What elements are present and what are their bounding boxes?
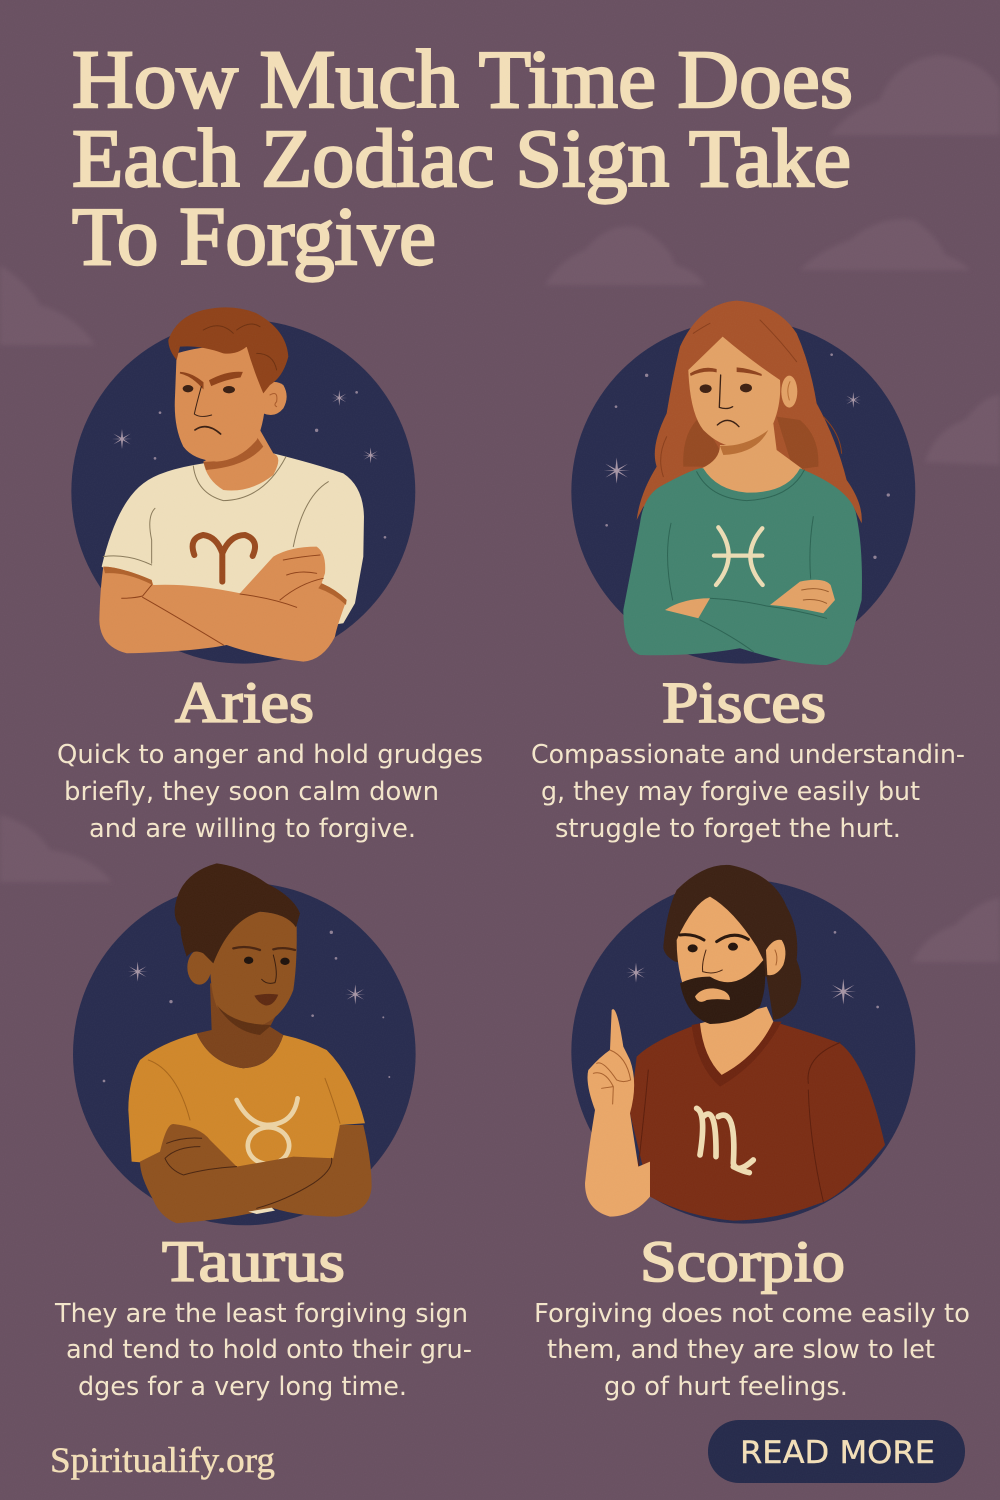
text: Scorpio description: them, and they are slow to let — [547, 1335, 935, 1365]
panel: Scorpio — [534, 865, 970, 1402]
heading: Pisces: Pisces — [662, 670, 826, 735]
text: Scorpio description: go of hurt feelings. — [604, 1372, 848, 1402]
text: Scorpio description — [534, 1299, 970, 1402]
brand name: Spiritualify.org — [50, 1440, 275, 1480]
panel: Pisces — [531, 301, 965, 844]
text: Taurus description: They are the least forgiving sign — [54, 1299, 468, 1329]
text: Pisces description: Compassionate and understandin- — [531, 740, 965, 770]
text: Aries description: and are willing to forgive. — [89, 814, 416, 844]
title: How Much Time Does — [72, 33, 853, 125]
title — [72, 33, 853, 282]
button: read more: READ MORE — [740, 1435, 935, 1471]
illustration: Scorpio bearded man raising finger — [571, 865, 915, 1224]
heading: Aries: Aries — [175, 670, 314, 735]
text: Pisces description: struggle to forget the hurt. — [555, 814, 901, 844]
button: read more — [708, 1420, 965, 1483]
text: Taurus description: and tend to hold onto their gru- — [66, 1335, 472, 1365]
text: Pisces description — [531, 740, 965, 844]
text: Aries description: briefly, they soon calm down — [64, 777, 439, 807]
text: Aries description: Quick to anger and hold grudges — [57, 740, 483, 770]
heading: Taurus: Taurus — [162, 1229, 345, 1294]
background clouds — [0, 55, 1000, 962]
title: To Forgive — [72, 190, 436, 282]
panel: Taurus — [54, 863, 472, 1402]
heading: Scorpio: Scorpio — [640, 1229, 845, 1294]
text: Taurus description: dges for a very long time. — [78, 1372, 407, 1402]
panel: Aries — [57, 307, 483, 844]
title: Each Zodiac Sign Take — [72, 112, 851, 204]
illustration: Aries angry man — [71, 307, 415, 664]
text: Pisces description: g, they may forgive easily but — [541, 777, 920, 807]
text: Scorpio description: Forgiving does not come easily to — [534, 1299, 970, 1329]
illustration: Pisces sad woman — [571, 301, 915, 665]
text: Aries description — [57, 740, 483, 844]
illustration: Taurus woman with hair bun — [73, 863, 416, 1225]
text: Taurus description — [54, 1299, 472, 1402]
